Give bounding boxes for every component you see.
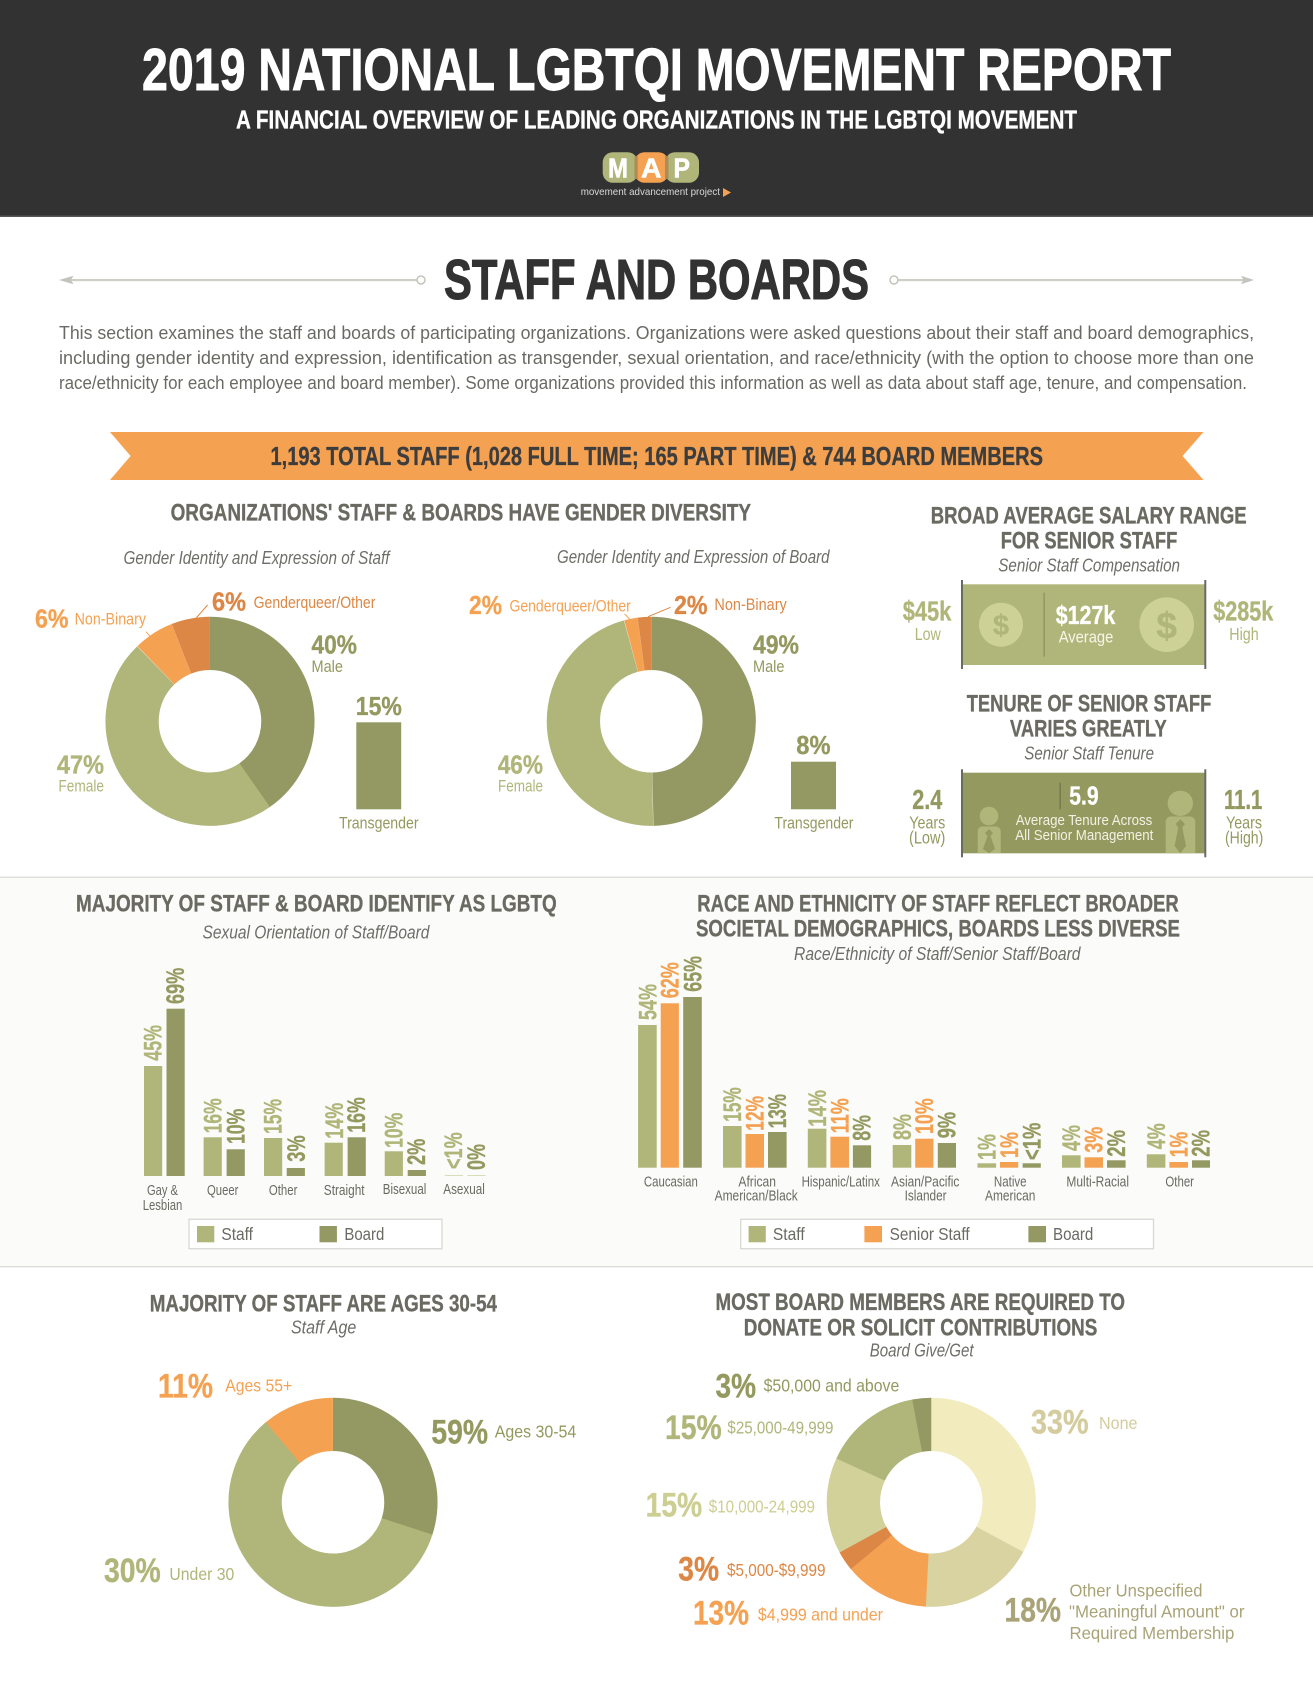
category labels: Lesbian	[143, 1198, 182, 1214]
low tenure: (Low)	[909, 827, 945, 847]
logo: MAP: P	[674, 152, 690, 184]
label: under 30: Under 30	[169, 1564, 235, 1584]
bar value labels	[634, 956, 1216, 1160]
low tenure	[909, 784, 946, 847]
label: genderqueer	[212, 587, 376, 617]
legend: Board	[344, 1224, 384, 1244]
heading	[931, 502, 1247, 554]
bar value labels: 4%	[1058, 1125, 1086, 1151]
bar value labels: 16%	[199, 1098, 227, 1133]
bar value labels	[140, 968, 491, 1170]
header banner	[0, 0, 1313, 217]
high tenure: Years	[1226, 812, 1262, 832]
panel: board give/get	[646, 1289, 1245, 1643]
bar: transgender: 8%	[796, 730, 830, 760]
category labels: Other	[269, 1183, 298, 1199]
label: $5,000-$9,999: $5,000-$9,999	[727, 1560, 826, 1580]
legend: Staff	[773, 1224, 805, 1244]
donut chart: staff gender	[100, 611, 320, 831]
panel: senior staff salary	[903, 502, 1274, 669]
heading: SOCIETAL DEMOGRAPHICS, BOARDS LESS DIVERSE	[696, 916, 1180, 943]
label: ages 30-54: Ages 30-54	[495, 1422, 577, 1442]
label: none	[1031, 1403, 1138, 1441]
bar value labels: 10%	[380, 1113, 408, 1148]
category labels: Queer	[207, 1183, 239, 1199]
low salary: $45k	[903, 596, 952, 627]
bar value labels: 11%	[827, 1098, 855, 1133]
heading: TENURE OF SENIOR STAFF	[967, 691, 1211, 718]
bar value labels: 65%	[679, 956, 707, 992]
bar value labels: 1%	[996, 1132, 1024, 1158]
intro paragraph	[59, 322, 1254, 393]
panel: race and ethnicity	[634, 890, 1216, 1249]
label: non-binary: Non-Binary	[75, 611, 147, 629]
bar value labels: 2%	[1188, 1130, 1216, 1157]
legend	[189, 1219, 442, 1249]
label: female: 46%	[498, 749, 543, 779]
icon: small coin: $	[993, 610, 1009, 642]
category labels: Gay &	[147, 1183, 178, 1199]
low tenure: Years	[909, 812, 946, 832]
logo: MAP	[581, 152, 731, 198]
panel: gender identity of board	[469, 546, 854, 833]
heading: MAJORITY OF STAFF & BOARD IDENTIFY AS LGBTQ	[76, 890, 557, 917]
label: non-binary	[35, 603, 147, 633]
bar value labels: 16%	[343, 1097, 371, 1133]
label: ages 55+	[158, 1367, 292, 1405]
label: female	[498, 749, 543, 796]
label: male: Male	[753, 658, 784, 676]
category labels	[644, 1175, 1194, 1205]
bar: transgender: 15%	[356, 691, 402, 721]
logo: MAP: A	[641, 152, 662, 184]
subheading: Board Give/Get	[870, 1340, 974, 1361]
panel: staff age	[104, 1290, 577, 1612]
label: genderqueer: Genderqueer/Other	[510, 598, 631, 616]
label: genderqueer: Genderqueer/Other	[254, 594, 376, 612]
bar value labels: 2%	[403, 1139, 431, 1165]
subheading: Gender Identity and Expression of Staff	[124, 547, 391, 568]
panel: gender identity of staff	[35, 547, 419, 833]
bar value labels: 9%	[934, 1112, 962, 1138]
label: female: Female	[58, 778, 104, 796]
low salary	[903, 596, 952, 644]
label: ages 55+: Ages 55+	[225, 1376, 292, 1396]
bar value labels: 1%	[1166, 1132, 1194, 1157]
heading	[716, 1289, 1125, 1341]
low salary: Low	[915, 624, 941, 644]
label: $4,999 and under: $4,999 and under	[758, 1605, 883, 1625]
bar value labels: 10%	[911, 1098, 939, 1134]
bar value labels: 4%	[1143, 1123, 1171, 1149]
heading: MAJORITY OF STAFF ARE AGES 30-54	[150, 1290, 498, 1317]
label: $50,000 and above	[716, 1367, 899, 1405]
high salary	[1213, 596, 1274, 644]
bar: transgender	[774, 730, 854, 833]
category labels: Bisexual	[383, 1182, 426, 1198]
label: $4,999 and under	[693, 1594, 883, 1632]
icon: small person	[978, 807, 1001, 853]
category labels: Native	[994, 1175, 1027, 1191]
label: other unspecified: 18%	[1004, 1592, 1061, 1630]
low tenure: 2.4	[912, 784, 943, 815]
label: $25,000-49,999: 15%	[665, 1409, 722, 1447]
high tenure: (High)	[1225, 827, 1263, 847]
bar: transgender: Transgender	[339, 815, 419, 833]
orange ribbon: totals: 1,193 TOTAL STAFF (1,028 FULL TIME; 165 PART TIME) & 744 BOARD MEMBERS	[270, 441, 1043, 471]
intro paragraph: including gender identity and expression, identification as transgender, sexual orientation, and race/ethnicity (with the option to choose more than one	[59, 347, 1254, 368]
bar value labels: <1%	[440, 1132, 468, 1169]
label: $50,000 and above: $50,000 and above	[764, 1376, 899, 1396]
donut chart: staff age	[223, 1393, 443, 1612]
heading: gender diversity: ORGANIZATIONS' STAFF & BOARDS HAVE GENDER DIVERSITY	[171, 500, 751, 527]
label: none: 33%	[1031, 1403, 1088, 1441]
bar value labels: 54%	[634, 984, 662, 1020]
label: female	[57, 749, 104, 796]
label: other unspecified: Other Unspecified	[1070, 1581, 1202, 1601]
label: male	[753, 629, 799, 676]
label: under 30: 30%	[104, 1552, 161, 1590]
average tenure	[1015, 780, 1154, 844]
average salary	[1056, 600, 1116, 647]
category labels: Straight	[324, 1183, 365, 1199]
heading	[696, 890, 1180, 943]
average salary: $127k	[1056, 600, 1116, 630]
bar value labels: 10%	[222, 1109, 250, 1144]
bar chart: sexual orientation	[140, 968, 491, 1214]
label: other unspecified: "Meaningful Amount" or	[1069, 1602, 1245, 1622]
donut chart: board give/get	[822, 1393, 1041, 1612]
average salary: Average	[1059, 629, 1113, 647]
bar value labels: 2%	[1103, 1130, 1131, 1157]
icon: large coin: $	[1156, 605, 1177, 646]
label: $10,000-24,999: $10,000-24,999	[709, 1496, 815, 1516]
label: non-binary: 2%	[674, 590, 708, 620]
category labels: Other	[1165, 1175, 1194, 1191]
label: genderqueer: 6%	[212, 587, 246, 617]
panel: senior staff tenure	[909, 691, 1263, 857]
label: $10,000-24,999	[646, 1487, 815, 1525]
category labels	[143, 1182, 485, 1214]
bar value labels: 15%	[260, 1099, 288, 1134]
label: under 30	[104, 1552, 235, 1590]
label: other unspecified	[1004, 1581, 1245, 1643]
heading: RACE AND ETHNICITY OF STAFF REFLECT BROADER	[697, 890, 1179, 917]
legend: Staff	[221, 1224, 253, 1244]
bar: transgender: Transgender	[774, 815, 854, 833]
heading: FOR SENIOR STAFF	[1001, 527, 1177, 554]
bar chart: race and ethnicity	[634, 956, 1216, 1205]
legend: Senior Staff	[890, 1224, 970, 1244]
label: $5,000-$9,999	[678, 1551, 826, 1589]
bar value labels: 1%	[974, 1134, 1002, 1160]
bar: transgender	[339, 691, 419, 833]
label: $4,999 and under: 13%	[693, 1594, 749, 1632]
label: ages 30-54: 59%	[431, 1413, 488, 1451]
logo: MAP: movement advancement project	[581, 186, 720, 198]
label: non-binary	[674, 590, 787, 620]
category labels: Asexual	[443, 1182, 485, 1198]
bar value labels: 62%	[656, 962, 684, 998]
icon: small coin	[979, 603, 1023, 647]
category labels: Hispanic/Latinx	[802, 1175, 880, 1191]
bar value labels: 45%	[140, 1025, 168, 1061]
label: ages 55+: 11%	[158, 1367, 213, 1405]
heading: VARIES GREATLY	[1010, 716, 1167, 743]
label: female: Female	[498, 778, 543, 796]
subheading: Senior Staff Compensation	[998, 555, 1180, 576]
intro paragraph: This section examines the staff and boards of participating organizations. Organizations were asked questions about their staff and board demographics,	[59, 322, 1254, 343]
orange ribbon: totals	[110, 432, 1204, 480]
panel: sexual orientation	[76, 890, 557, 1249]
high tenure	[1224, 784, 1263, 847]
high salary: $285k	[1213, 596, 1274, 627]
subheading: Race/Ethnicity of Staff/Senior Staff/Board	[794, 943, 1081, 964]
label: non-binary: Non-Binary	[714, 596, 787, 614]
label: genderqueer	[469, 590, 631, 620]
bar value labels: 3%	[1081, 1127, 1109, 1153]
label: non-binary: 6%	[35, 603, 68, 633]
average tenure: 5.9	[1069, 780, 1099, 810]
category labels: American	[985, 1189, 1035, 1205]
salary range bar	[961, 580, 1206, 669]
subheading: Sexual Orientation of Staff/Board	[202, 922, 430, 943]
label: $10,000-24,999: 15%	[646, 1487, 702, 1525]
label: male: Male	[312, 658, 343, 676]
category labels: Islander	[905, 1189, 947, 1205]
section heading: staff and boards	[59, 248, 1254, 311]
average tenure: Average Tenure Across	[1016, 812, 1152, 829]
label: $25,000-49,999	[665, 1409, 834, 1447]
donut chart: board gender	[556, 626, 747, 817]
category labels: American/Black	[715, 1189, 798, 1205]
label: other unspecified: Required Membership	[1070, 1623, 1234, 1643]
icon: large person	[1166, 791, 1195, 853]
bar value labels: 8%	[849, 1115, 877, 1141]
legend: Board	[1053, 1224, 1093, 1244]
tenure range bar	[961, 769, 1206, 857]
category labels: Caucasian	[644, 1175, 698, 1191]
legend	[741, 1219, 1154, 1249]
high salary: High	[1229, 624, 1259, 644]
label: $25,000-49,999: $25,000-49,999	[727, 1417, 834, 1437]
bar value labels: 12%	[742, 1096, 770, 1131]
subheading: Gender Identity and Expression of Board	[557, 546, 830, 567]
category labels: Asian/Pacific	[891, 1175, 959, 1191]
bar value labels: 14%	[321, 1103, 349, 1139]
average tenure: All Senior Management	[1015, 827, 1154, 844]
bar value labels: <1%	[1018, 1123, 1046, 1160]
bar value labels: 8%	[889, 1114, 917, 1140]
category labels: Multi-Racial	[1066, 1175, 1129, 1191]
label: none: None	[1099, 1413, 1138, 1433]
logo: MAP: M	[608, 152, 628, 184]
label: $50,000 and above: 3%	[716, 1367, 756, 1405]
subtitle: A FINANCIAL OVERVIEW OF LEADING ORGANIZATIONS IN THE LGBTQI MOVEMENT	[236, 105, 1077, 135]
bar value labels: 3%	[283, 1135, 311, 1162]
subheading: Senior Staff Tenure	[1024, 742, 1154, 763]
bar value labels: 0%	[463, 1144, 491, 1170]
label: ages 30-54	[431, 1413, 577, 1451]
label: female: 47%	[57, 749, 104, 779]
label: male: 49%	[753, 629, 799, 659]
high tenure: 11.1	[1224, 784, 1262, 815]
heading: DONATE OR SOLICIT CONTRIBUTIONS	[744, 1314, 1097, 1341]
label: $5,000-$9,999: 3%	[678, 1551, 719, 1589]
label: male: 40%	[312, 629, 357, 659]
icon: large coin	[1139, 597, 1194, 652]
bar value labels: 13%	[764, 1094, 792, 1128]
section heading: staff and boards: STAFF AND BOARDS	[444, 248, 869, 311]
bar value labels: 69%	[162, 968, 190, 1004]
heading	[967, 691, 1211, 743]
category labels: African	[738, 1175, 776, 1191]
label: genderqueer: 2%	[469, 590, 502, 620]
subheading: Staff Age	[291, 1316, 356, 1337]
label: male	[312, 629, 357, 676]
bar value labels: 15%	[719, 1087, 747, 1122]
bar value labels: 14%	[804, 1090, 832, 1127]
heading: MOST BOARD MEMBERS ARE REQUIRED TO	[716, 1289, 1125, 1316]
